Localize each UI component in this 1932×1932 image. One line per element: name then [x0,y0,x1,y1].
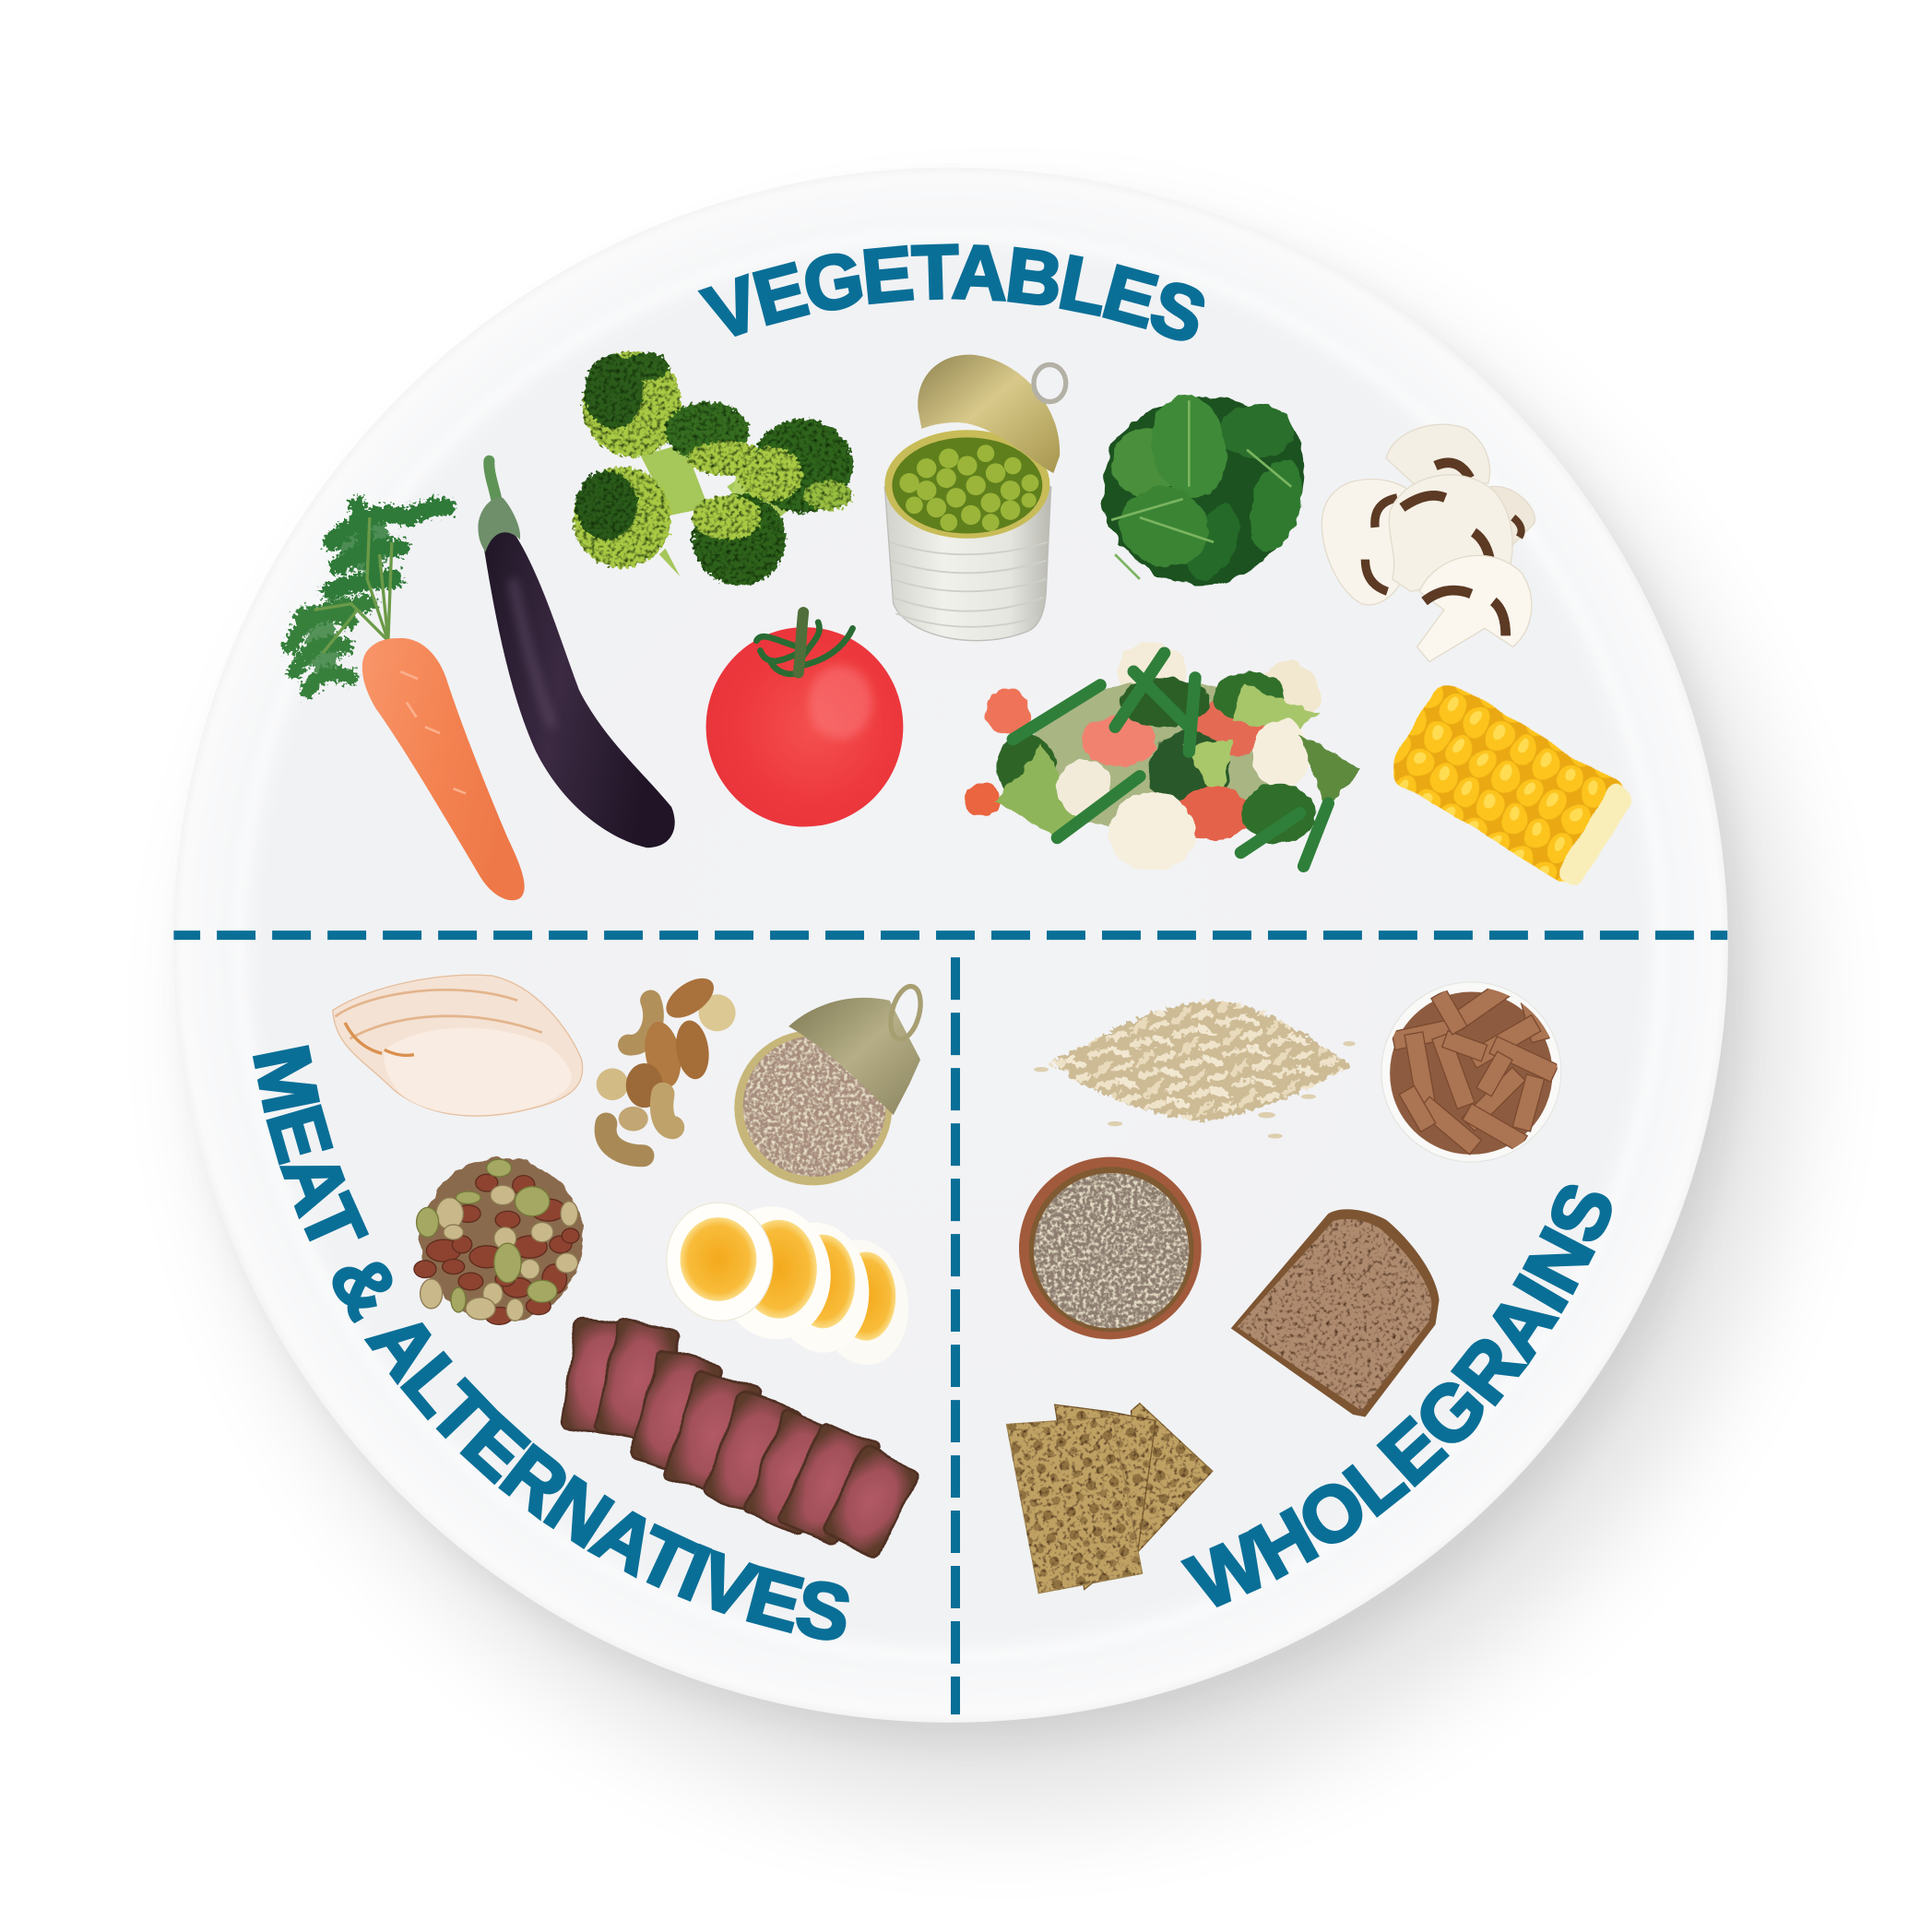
horizontal dashed divider [173,931,1727,939]
icon: sliced steak [562,1317,919,1559]
heading: meat and alternatives: MEAT & ALTERNATIVES [253,1045,849,1641]
icon: bowl of wholemeal pasta [1381,980,1561,1162]
icon: mixed beans [414,1158,583,1324]
panel: vegetables [290,351,1636,900]
icon: mixed nuts [597,970,736,1156]
icon: carrot [290,505,525,900]
icon: sliced mushrooms [1322,424,1535,661]
icon: slice of wholegrain bread [1231,1209,1440,1417]
healthy plate infographic [173,168,1817,1835]
icon: sliced turkey [333,975,583,1116]
heading: vegetables: VEGETABLES [697,243,1204,341]
icon: brown rice [1034,1001,1356,1139]
icon: can of tuna [734,983,926,1185]
icon: tomato [706,612,903,827]
icon: crispbread crackers [1007,1404,1213,1594]
plate shadow [194,194,1793,1811]
heading: wholegrains: WHOLEGRAINS [1180,1184,1612,1608]
icon: sliced boiled egg [658,1196,917,1371]
icon: bowl of quinoa [1019,1157,1202,1339]
vertical dashed divider [952,957,959,1714]
icon: frozen mixed vegetables [966,642,1361,871]
panel: wholegrains [1007,980,1561,1594]
icon: corn on the cob [1384,678,1636,891]
panel: meat and alternatives [333,970,926,1559]
icon: eggplant [478,461,675,847]
plate [173,168,1728,1723]
icon: broccoli [573,351,853,586]
icon: can of peas [884,355,1066,641]
icon: spinach [1102,388,1311,587]
